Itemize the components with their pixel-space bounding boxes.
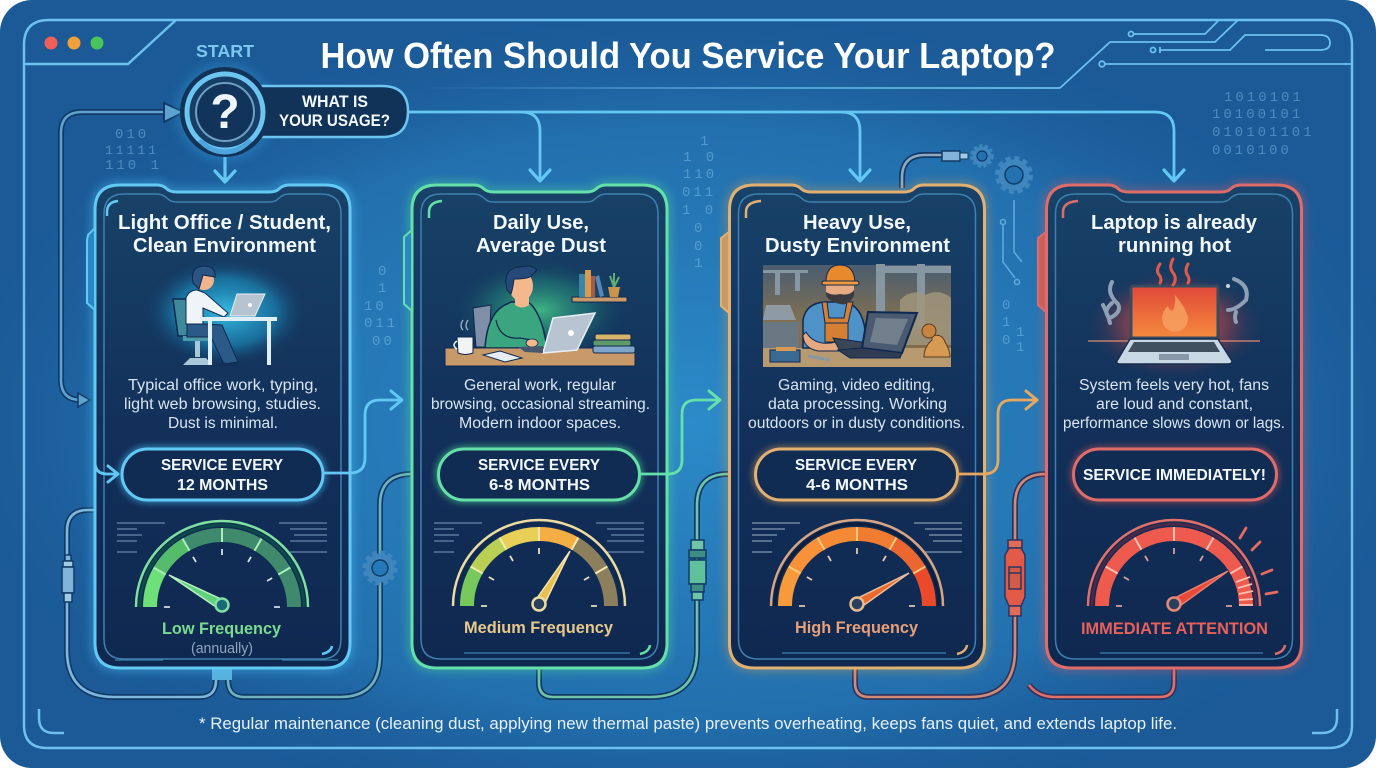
service pill: 4-6 MONTHS (806, 477, 908, 494)
window control dots (44, 36, 104, 50)
card 4 heading (1091, 211, 1258, 257)
card 3 heading: Heavy Use, (803, 211, 911, 234)
card 4 description: System feels very hot, fans (1079, 377, 1269, 394)
circuit traces near gears (1000, 200, 1022, 284)
service pill (1074, 449, 1276, 500)
service pill: 12 MONTHS (177, 477, 268, 494)
binary decoration: 0 (1002, 333, 1013, 349)
binary decoration: 0010100 (1212, 143, 1292, 159)
binary decoration: 0 (1002, 298, 1013, 314)
cable: card 2 to card 3 (539, 465, 755, 697)
card 2 description: Modern indoor spaces. (459, 415, 621, 432)
gauge label: (annually) (191, 641, 253, 657)
card 1 heading: Clean Environment (133, 234, 316, 257)
illustration: person at desk (140, 256, 310, 368)
circuit traces top right (420, 20, 1352, 88)
service pill: SERVICE EVERY (795, 457, 917, 474)
arrow: card 1 to card 2 (323, 391, 402, 473)
card 4 description: are loud and constant, (1096, 396, 1253, 413)
binary decoration: 0 (694, 221, 705, 237)
service pill (438, 449, 640, 500)
illustration: overheating laptop (1083, 259, 1267, 381)
card 1 heading: Light Office / Student, (118, 211, 331, 234)
card 2 description: General work, regular (464, 377, 616, 394)
title: How Often Should You Service Your Laptop? (320, 35, 1056, 76)
gauge label: High Frequency (795, 618, 919, 637)
card 3 description: data processing. Working (768, 396, 947, 413)
card 2 heading: Average Dust (476, 234, 606, 257)
card 4 heading: Laptop is already (1091, 211, 1258, 234)
service pill (756, 449, 958, 500)
arrow: card 2 to card 3 (640, 391, 720, 474)
cable: card 3 to card 4 (855, 465, 1073, 697)
usage pill: YOUR USAGE? (279, 112, 390, 130)
binary decoration: 011 (682, 185, 716, 201)
panel: card 1 light office (87, 185, 350, 668)
binary decoration: 0 (378, 264, 389, 280)
card 2 heading (476, 211, 606, 257)
panel: card 4 running hot (1038, 185, 1302, 668)
binary decoration (105, 90, 1315, 356)
cable: left and gear connector (67, 466, 438, 697)
service pill: SERVICE IMMEDIATELY! (1083, 467, 1266, 484)
card 3 heading: Dusty Environment (765, 234, 950, 257)
gauge label: IMMEDIATE ATTENTION (1081, 619, 1268, 638)
gauge: immediate (1088, 520, 1277, 610)
card 1 description (124, 377, 321, 432)
binary decoration: 010101101 (1212, 125, 1315, 141)
card 1 description: Dust is minimal. (168, 415, 278, 432)
card 3 description (748, 377, 965, 432)
binary decoration: 1 (694, 256, 705, 272)
usage pill: WHAT IS (302, 93, 368, 111)
binary decoration: 1010101 (1224, 90, 1304, 106)
card 3 description: Gaming, video editing, (778, 377, 935, 394)
arrow: left entry to service pill (95, 462, 118, 482)
binary decoration: 1 0 (682, 203, 716, 219)
binary decoration: 1 (1016, 325, 1027, 341)
binary decoration: 1 (1002, 315, 1013, 331)
gauge: high (752, 520, 962, 610)
card 2 heading: Daily Use, (493, 211, 589, 234)
panel: card 3 heavy use (721, 185, 984, 668)
card 3 description: outdoors or in dusty conditions. (748, 415, 965, 432)
cable and gears above card 3 (902, 146, 1030, 192)
usage pill (250, 86, 408, 137)
binary decoration: 1 (378, 281, 389, 297)
connector: bottom of card 1 (212, 669, 232, 680)
footnote: * Regular maintenance (cleaning dust, applying new thermal paste) prevents overheating, keeps fans quiet, and extends laptop life. (199, 714, 1177, 733)
card 2 description (431, 377, 650, 432)
service pill: SERVICE EVERY (478, 457, 600, 474)
card 1 description: light web browsing, studies. (124, 396, 321, 413)
gauge label: Medium Frequency (464, 618, 614, 637)
gauge: low (117, 521, 327, 612)
binary decoration: 1 (1016, 340, 1027, 356)
arrow: loop back to start (61, 103, 184, 407)
binary decoration: 1 (700, 134, 711, 150)
service pill: SERVICE EVERY (161, 457, 283, 474)
arrow: start flow to all branches (215, 112, 1184, 182)
binary decoration: 1 0 (683, 150, 717, 166)
card 1 description: Typical office work, typing, (128, 377, 318, 394)
start label: START (196, 41, 254, 61)
binary decoration: 011 (364, 316, 398, 332)
start node: ? (210, 86, 240, 139)
service pill (122, 449, 323, 500)
service pill: 6-8 MONTHS (489, 477, 590, 494)
binary decoration: 11111 (105, 143, 159, 158)
card 1 heading (118, 211, 331, 257)
illustration: worker in dusty site (763, 264, 951, 367)
binary decoration: 110 1 (105, 158, 162, 174)
binary decoration: 10100101 (1212, 107, 1303, 123)
panel: card 2 daily use (404, 185, 667, 668)
binary decoration: 10 (364, 299, 387, 315)
card 4 description (1063, 377, 1285, 432)
connector: green plug (689, 540, 706, 600)
gauge label: Low Frequency (162, 619, 282, 638)
gauge label (162, 619, 282, 657)
connector: left cable plug (62, 555, 74, 602)
cable: card 4 return (1029, 668, 1174, 697)
card 4 heading: running hot (1118, 234, 1231, 257)
card 4 description: performance slows down or lags. (1063, 415, 1285, 432)
binary decoration: 0 (694, 239, 705, 255)
connector: red plug (1005, 540, 1025, 616)
binary decoration: 110 (683, 167, 717, 183)
binary decoration: 00 (372, 334, 395, 350)
binary decoration: 010 (115, 127, 149, 143)
icon: gear between card 1 and 2 (365, 553, 395, 583)
illustration: person with laptop on desk (445, 256, 635, 366)
arrow: card 3 to card 4 (958, 391, 1037, 474)
gauge: medium (434, 520, 644, 610)
start node (175, 62, 408, 162)
card 2 description: browsing, occasional streaming. (431, 396, 650, 413)
card 3 heading (765, 211, 950, 257)
